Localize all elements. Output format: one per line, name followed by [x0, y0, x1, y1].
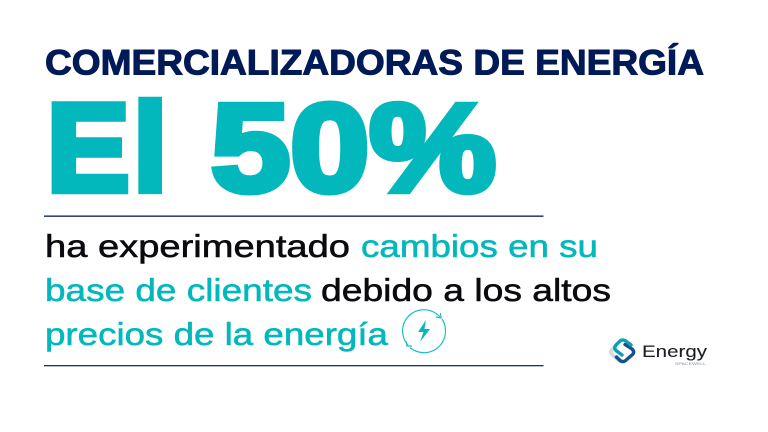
bottom rule [44, 365, 544, 366]
logo wordmark: Energy [642, 342, 708, 361]
headline: El 50%: El [46, 79, 168, 218]
top rule [44, 216, 544, 217]
title: COMERCIALIZADORAS DE ENERGÍA [45, 42, 704, 82]
body text: base de clientes [45, 272, 312, 308]
body text: cambios en su [361, 228, 598, 264]
logo mark [611, 340, 634, 362]
body text: ha experimentado [45, 228, 350, 264]
logo subtitle: SPACEWELL [675, 361, 707, 366]
headline: El 50% [46, 79, 496, 218]
body text: debido a los altos [321, 272, 611, 308]
body text: precios de la energía [45, 316, 389, 352]
icon: energy cycle [403, 310, 446, 353]
logo: Energy Spacewell [611, 340, 708, 366]
headline: El 50%: 50% [211, 79, 496, 218]
body text [45, 228, 611, 352]
